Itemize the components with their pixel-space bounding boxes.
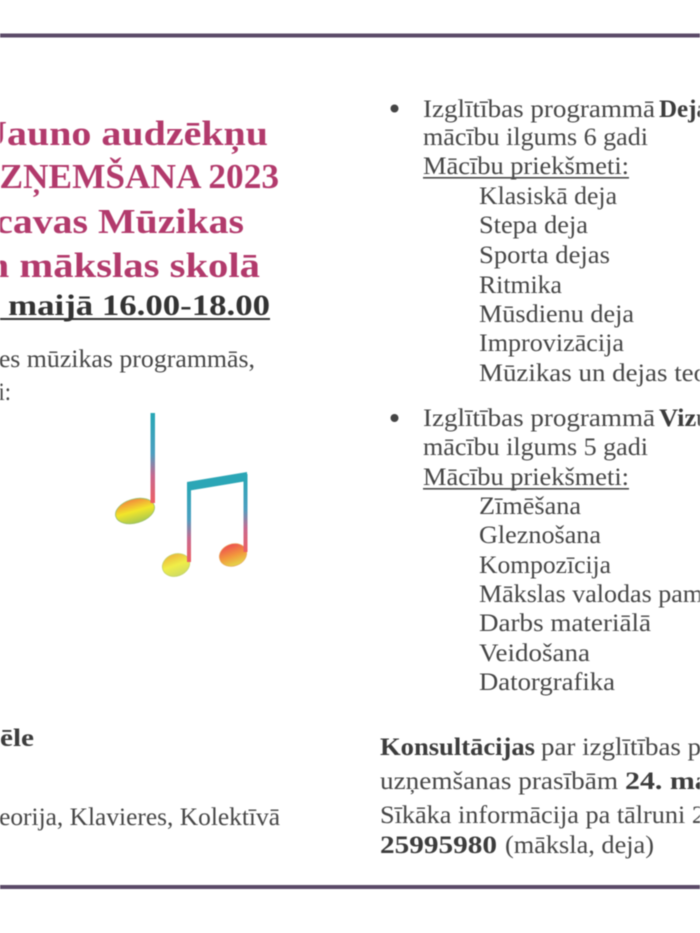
left column: intro text [0,346,255,406]
panel: dance programme [390,96,700,387]
subjects list [479,493,700,696]
left column: title [0,114,279,285]
icon: bullet [390,414,398,422]
subjects list: Darbs materiālā [479,610,651,637]
text block: consultations and contact: Konsultācijas [380,734,535,761]
programme duration: mācību ilgums 6 gadi [423,124,648,151]
top border line [0,34,700,38]
subjects list: Veidošana [479,640,590,667]
programme heading: Izglītības programmā [423,405,655,432]
subjects list [479,183,700,387]
bottom border line [0,885,700,889]
subjects list: Stepa deja [479,212,588,239]
left column: subjects line: teorija, Klavieres, Kolektīvā [0,804,280,831]
subjects list: Datorgrafika [479,669,615,696]
programme heading: Izglītības programmā [423,96,655,123]
subjects heading: Mācību priekšmeti: [423,153,629,180]
left column: teacher name fragment: ēle [0,725,34,752]
text block: consultations and contact: (māksla, deja) [505,832,654,859]
subjects list: Ritmika [479,272,562,299]
panel: visual art programme [390,405,700,696]
text block: consultations and contact: uzņemšanas prasībām [380,768,619,795]
icon: bullet [390,104,398,112]
subjects list: Kompozīcija [479,552,611,579]
subjects list: Improvizācija [479,330,624,357]
subjects heading: Mācību priekšmeti: [423,464,629,491]
icon: rainbow music notes [112,413,250,580]
text block: consultations and contact: Sīkāka informācija pa tālruni 2 [380,802,700,829]
subjects list: Zīmēšana [479,493,581,520]
subjects list: Klasiskā deja [479,183,617,210]
text block: consultations and contact: 25995980 [380,832,497,859]
text block: consultations and contact [380,734,700,859]
subjects list: Gleznošana [479,522,601,549]
subjects list: Sporta dejas [479,242,610,269]
programme duration: mācību ilgums 5 gadi [423,434,648,461]
subjects list: Mūsdienu deja [479,301,634,328]
